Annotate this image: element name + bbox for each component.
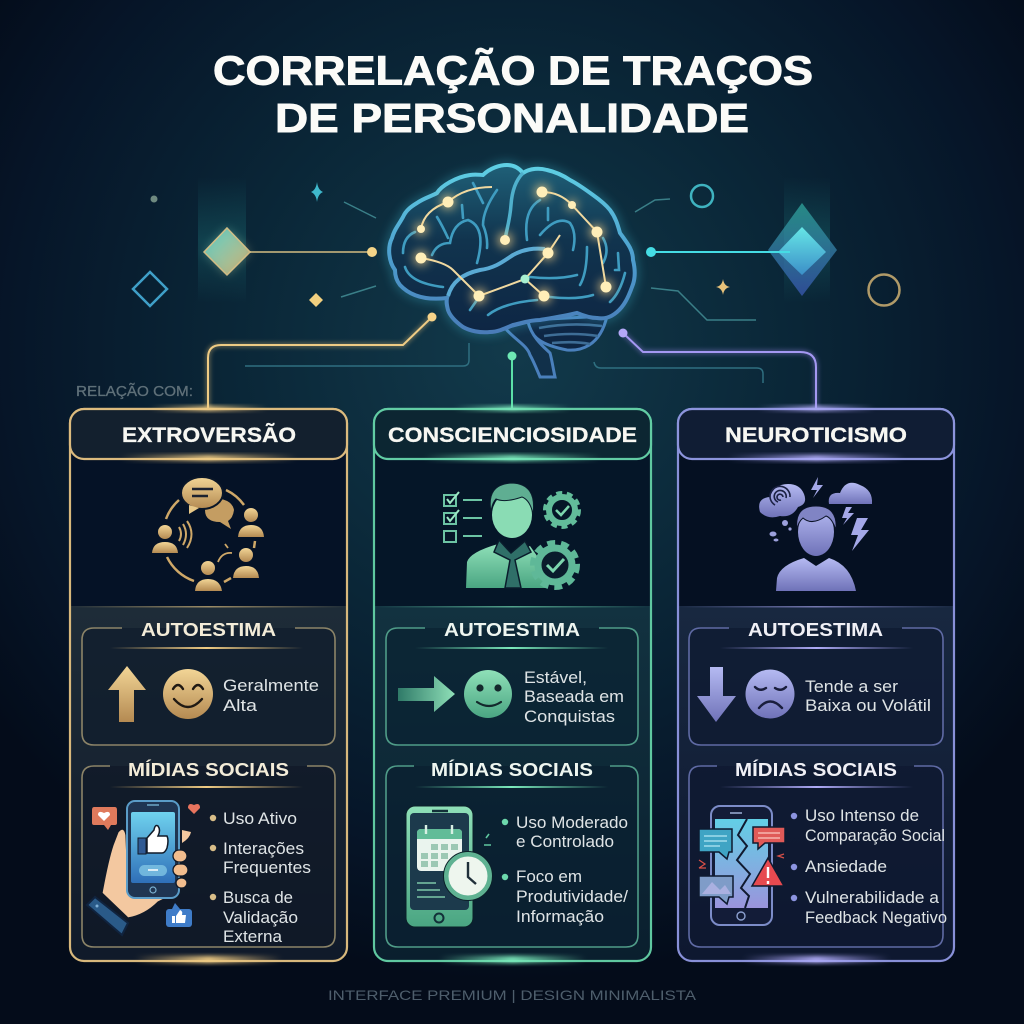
icon: phone in hand: [87, 801, 200, 935]
box: mídias sociais: [386, 759, 638, 947]
list: uso ativo: Uso Ativo: [223, 809, 297, 828]
title: DE PERSONALIDADE: [275, 95, 749, 141]
right diamond connector: [646, 203, 837, 296]
text: tende: [805, 677, 931, 715]
header: neuroticismo: [678, 406, 954, 461]
list: uso intenso: Vulnerabilidade a: [805, 888, 940, 907]
title: CORRELAÇÃO DE TRAÇOS: [213, 48, 813, 94]
icon: happy face: [163, 669, 213, 719]
text: estável: Baseada em: [524, 687, 624, 706]
list: uso moderado: [502, 813, 628, 926]
panel: extroversão: [70, 406, 347, 963]
header: extroversão: [70, 406, 347, 461]
list: uso moderado: e Controlado: [516, 832, 614, 851]
text: estável: Estável,: [524, 668, 587, 687]
icon: social circle: [152, 477, 264, 591]
box: autoestima: AUTOESTIMA: [141, 619, 276, 640]
list: uso intenso: Feedback Negativo: [805, 908, 947, 927]
icon: arrow down: [697, 667, 736, 722]
connector: purple: [618, 328, 816, 409]
box: autoestima: [82, 619, 335, 745]
list: uso ativo: Externa: [223, 927, 283, 946]
icon: cracked phone: [699, 806, 785, 925]
list: uso moderado: Produtividade/: [516, 887, 628, 906]
list: uso ativo: Interações: [223, 839, 304, 858]
text: estável: [524, 668, 624, 726]
list: uso ativo: [210, 809, 311, 946]
box: autoestima: [386, 619, 638, 745]
text: geralmente alta: Alta: [223, 696, 258, 715]
brain: [389, 165, 635, 377]
box: mídias sociais: [82, 759, 335, 947]
text: estável: Conquistas: [524, 707, 615, 726]
text: tende: Tende a ser: [805, 677, 898, 696]
text: tende: Baixa ou Volátil: [805, 696, 931, 715]
header: neuroticismo: NEUROTICISMO: [725, 424, 907, 447]
panel: neuroticismo: [678, 406, 954, 963]
box: mídias sociais: MÍDIAS SOCIAIS: [735, 759, 897, 780]
footer: INTERFACE PREMIUM | DESIGN MINIMALISTA: [328, 987, 697, 1003]
icon: organized person: [444, 483, 579, 588]
decorative nodes around brain: [133, 177, 900, 383]
header: conscienciosidade: CONSCIENCIOSIDADE: [388, 424, 637, 447]
icon: phone with calendar and clock: [406, 806, 492, 927]
connector: gold: [208, 312, 436, 409]
list: uso intenso: Uso Intenso de: [805, 806, 919, 825]
icon: anxious person: [759, 477, 872, 591]
icon: sad face: [746, 670, 794, 718]
list: uso ativo: Frequentes: [223, 858, 311, 877]
text: geralmente alta: Geralmente: [223, 676, 319, 695]
list: uso moderado: Uso Moderado: [516, 813, 628, 832]
icon: arrow up: [108, 666, 146, 722]
list: uso moderado: Informação: [516, 907, 604, 926]
list: uso moderado: Foco em: [516, 867, 582, 886]
box: mídias sociais: MÍDIAS SOCIAIS: [431, 759, 593, 780]
box: mídias sociais: MÍDIAS SOCIAIS: [128, 759, 289, 780]
icon: arrow right: [398, 676, 455, 712]
left diamond connector: [204, 228, 377, 275]
list: uso intenso: Ansiedade: [805, 857, 887, 876]
list: uso ativo: Busca de: [223, 888, 293, 907]
box: autoestima: [689, 619, 943, 745]
list: uso intenso: Comparação Social: [805, 826, 945, 845]
box: autoestima: AUTOESTIMA: [444, 619, 580, 640]
icon: neutral smile: [464, 670, 512, 718]
header: extroversão: EXTROVERSÃO: [122, 424, 296, 447]
box: mídias sociais: [689, 759, 947, 947]
header: conscienciosidade: [374, 406, 651, 461]
list: uso intenso: [791, 806, 947, 927]
label: relação com: RELAÇÃO COM:: [76, 383, 193, 400]
connector: green: [508, 352, 516, 409]
list: uso ativo: Validação: [223, 908, 298, 927]
panel: conscienciosidade: [374, 406, 651, 963]
box: autoestima: AUTOESTIMA: [748, 619, 883, 640]
text: geralmente alta: [223, 676, 319, 715]
title: [213, 48, 813, 141]
